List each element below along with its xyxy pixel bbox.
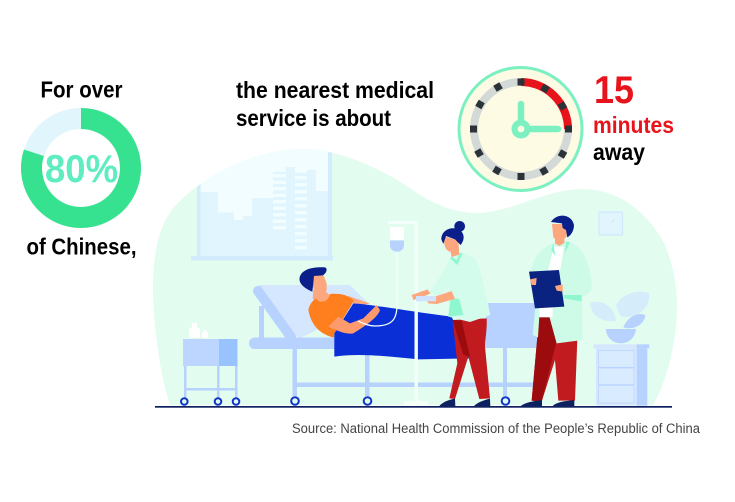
text: the nearest medical service: service is about [236,105,391,131]
shoes [439,399,455,406]
wall clock [599,212,622,235]
tunic body [448,253,490,322]
pants [449,318,490,399]
heading: For over: For over [40,76,123,102]
IV stand and bag [388,221,428,405]
green inner tunic [448,295,463,317]
hair [454,221,465,232]
pants [532,313,578,402]
text: 15 minutes away: minutes [593,112,674,138]
patient [299,267,470,359]
plant leaves [590,302,616,321]
back sleeve [429,257,455,297]
lab coat [530,242,592,343]
text: of Chinese: of Chinese, [26,234,136,260]
wheels [181,397,509,405]
hospital bed [249,285,537,396]
tray [416,296,436,301]
near arm [328,305,380,334]
shirt [548,247,564,272]
window with city skyline [191,140,333,260]
far arm [347,296,370,305]
background blob [153,149,677,405]
text: the nearest medical service [236,77,434,131]
hands [530,278,537,285]
neck and face [444,236,459,258]
shoes [521,400,542,406]
text: 15 minutes away: 15 [594,69,634,112]
clock icon [459,68,582,190]
floor line [155,406,672,408]
neck [313,290,331,303]
text: 15 minutes away [593,69,674,165]
donut chart: 80% [31,118,131,218]
bedside cart with bottles [183,323,238,399]
clipboard [529,270,564,308]
neck and face [555,235,565,246]
donut chart: 80%: 80% [45,148,118,191]
IV tube [358,250,397,326]
text: the nearest medical service: the nearest medical [236,77,434,103]
hair [299,267,327,292]
shirt [308,294,354,338]
bowl [606,329,636,343]
front sleeve [451,255,479,300]
blanket [334,303,470,359]
source note: Source: National Health Commission of the People’s Republic of China [292,421,700,436]
doctor [521,216,592,406]
nurse [412,221,490,406]
face [312,275,327,294]
arms [412,289,431,300]
stand [593,344,637,348]
text: 15 minutes away: away [593,139,645,165]
hair [551,216,574,237]
nightstand with plant [590,292,649,406]
